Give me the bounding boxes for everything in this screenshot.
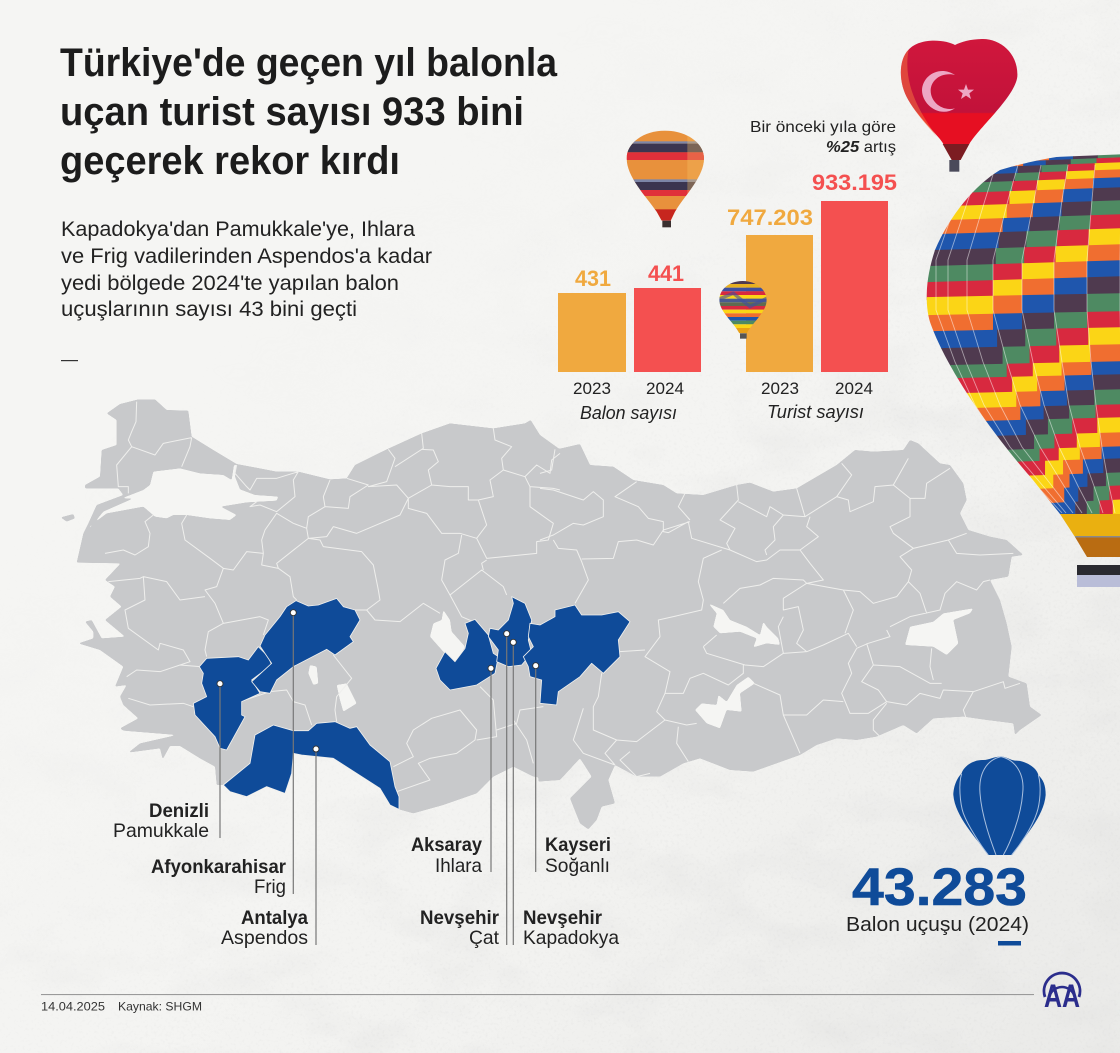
bar chart: balloon count: 2024 bbox=[646, 379, 684, 398]
map of Türkiye bbox=[61, 399, 1042, 829]
growth note: %25 artış bbox=[826, 139, 896, 156]
label: Kayseri Soğanlı bbox=[545, 834, 611, 877]
label: Aksaray Ihlara: Ihlara bbox=[435, 855, 482, 877]
basket with passengers bbox=[1077, 565, 1120, 575]
icon: large multicolour balloon bbox=[926, 154, 1120, 587]
label: Antalya Aspendos: Antalya bbox=[241, 907, 308, 929]
bar chart: balloon count bbox=[558, 261, 701, 423]
label: Nevşehir Kapadokya: Kapadokya bbox=[523, 927, 619, 949]
stat: 43.283 flights: 43.283 bbox=[852, 858, 1027, 917]
label: Nevşehir Kapadokya: Nevşehir bbox=[523, 907, 602, 929]
province: Antalya bbox=[223, 722, 399, 809]
label: Denizli Pamukkale: Denizli bbox=[149, 800, 209, 822]
location dots bbox=[217, 610, 539, 752]
footer source line bbox=[41, 994, 1034, 1014]
icon: small multicolour balloon bbox=[719, 281, 767, 339]
land mass bbox=[61, 399, 1042, 829]
bar chart: tourist count bbox=[727, 170, 897, 422]
bar chart: tourist count: 2023 bbox=[761, 379, 799, 398]
balloon collar bbox=[1060, 514, 1120, 537]
leader lines bbox=[220, 613, 536, 945]
title bbox=[60, 41, 558, 183]
seas and lakes bbox=[88, 465, 973, 728]
intro text: uçuşlarının sayısı 43 bini geçti bbox=[61, 298, 357, 321]
label: Kayseri Soğanlı: Kayseri bbox=[545, 834, 611, 856]
label: Nevşehir Çat: Nevşehir bbox=[420, 907, 499, 929]
province: Kayseri bbox=[523, 605, 630, 705]
bar chart: balloon count: Balon sayısı bbox=[580, 403, 677, 423]
highlighted provinces bbox=[193, 597, 630, 809]
AA logo: AA bbox=[1044, 978, 1080, 1014]
label: Afyonkarahisar Frig bbox=[151, 856, 286, 898]
province borders bbox=[105, 402, 1020, 792]
province: Aksaray bbox=[436, 619, 498, 690]
stat: 43.283 flights: Balon uçuşu (2024) bbox=[846, 914, 1029, 936]
bar chart: tourist count: 2024 bbox=[835, 379, 873, 398]
label: Antalya Aspendos: Aspendos bbox=[221, 927, 308, 949]
label: Nevşehir Çat bbox=[420, 907, 500, 949]
intro text bbox=[61, 218, 432, 321]
label: Antalya Aspendos bbox=[221, 907, 308, 949]
title: Türkiye'de geçen yıl balonla bbox=[60, 41, 558, 85]
title: uçan turist sayısı 933 bini bbox=[60, 90, 524, 134]
province: Afyonkarahisar bbox=[252, 598, 360, 693]
icon: orange striped balloon bbox=[623, 128, 707, 227]
bar chart: balloon count: 2023 bbox=[573, 379, 611, 398]
bar chart: tourist count: Turist sayısı bbox=[767, 402, 864, 422]
province: Nevşehir bbox=[488, 597, 532, 667]
footer source line: Kaynak: SHGM bbox=[118, 1000, 202, 1014]
growth note: Bir önceki yıla göre bbox=[750, 119, 896, 136]
label: Afyonkarahisar Frig: Frig bbox=[254, 876, 286, 898]
label: Afyonkarahisar Frig: Afyonkarahisar bbox=[151, 856, 286, 878]
intro text: Kapadokya'dan Pamukkale'ye, Ihlara bbox=[61, 218, 415, 241]
bar chart: balloon count: 441 bbox=[648, 261, 684, 286]
icon: blue balloon bbox=[953, 757, 1046, 855]
label: Aksaray Ihlara bbox=[411, 834, 482, 877]
stat: 43.283 flights bbox=[846, 757, 1046, 946]
title: geçerek rekor kırdı bbox=[60, 139, 400, 183]
label: Nevşehir Çat: Çat bbox=[469, 927, 500, 949]
crescent bbox=[922, 71, 955, 112]
bar chart: balloon count: 431 bbox=[575, 266, 611, 291]
label: Aksaray Ihlara: Aksaray bbox=[411, 834, 482, 856]
province: Denizli bbox=[193, 647, 272, 750]
label: Kayseri Soğanlı: Soğanlı bbox=[545, 855, 610, 877]
footer source line: 14.04.2025 bbox=[41, 1000, 105, 1014]
bar chart: tourist count: 747.203 bbox=[727, 205, 813, 230]
label: Nevşehir Kapadokya bbox=[523, 907, 619, 949]
land: west bbox=[61, 399, 560, 813]
label: Denizli Pamukkale bbox=[113, 800, 209, 842]
growth note bbox=[750, 119, 896, 156]
icon: heart balloon with Turkish flag bbox=[901, 39, 1017, 172]
land: east bbox=[538, 439, 1042, 829]
intro text: yedi bölgede 2024'te yapılan balon bbox=[61, 272, 399, 295]
bar chart: tourist count: 933.195 bbox=[812, 170, 897, 195]
star bbox=[958, 84, 974, 99]
intro text: ve Frig vadilerinden Aspendos'a kadar bbox=[61, 245, 432, 268]
label: Denizli Pamukkale: Pamukkale bbox=[113, 820, 209, 842]
